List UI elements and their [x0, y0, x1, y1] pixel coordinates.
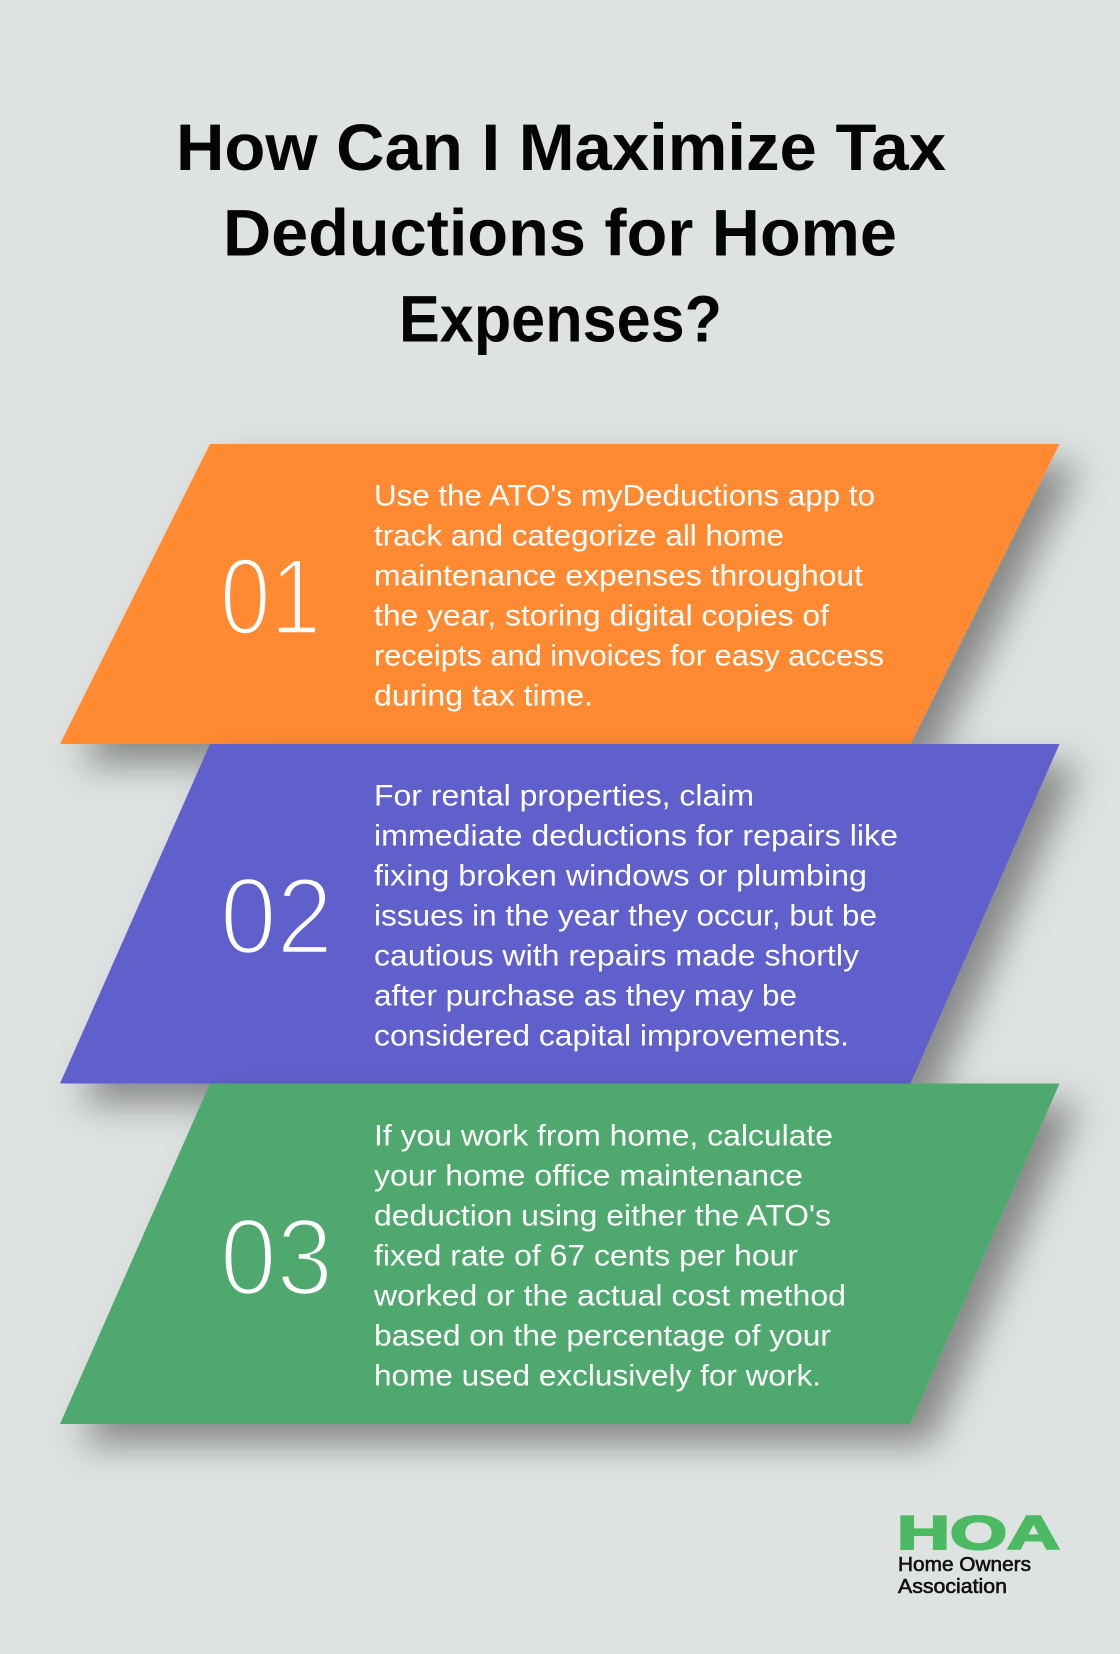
text: step 02 description: fixing broken windows or plumbing — [374, 860, 867, 892]
text: step 02 description: after purchase as they may be — [374, 980, 797, 1012]
text: step 01 description: maintenance expenses throughout — [374, 560, 863, 592]
number 03: 03 — [220, 1196, 333, 1318]
text: step 03 description: deduction using either the ATO's — [374, 1200, 831, 1232]
panel: step 03 — [60, 1084, 1060, 1424]
text: step 03 description: fixed rate of 67 cents per hour — [374, 1240, 798, 1272]
text: step 03 description: worked or the actual cost method — [373, 1280, 846, 1312]
number 01: 01 — [220, 536, 321, 658]
text: step 03 description: If you work from home, calculate — [374, 1120, 833, 1152]
title — [176, 110, 946, 356]
logo text: Association — [898, 1575, 1007, 1598]
orange parallelogram — [60, 444, 1060, 744]
title: How Can I Maximize Tax — [176, 110, 946, 184]
panel: step 02 — [60, 744, 1060, 1084]
panel: step 01 — [60, 444, 1060, 744]
logo text — [898, 1553, 1031, 1598]
logo: HOA Home Owners Association — [897, 1506, 1060, 1598]
text: step 02 description: cautious with repairs made shortly — [374, 940, 859, 972]
text: step 01 description: receipts and invoices for easy access — [374, 640, 884, 672]
title: Deductions for Home — [223, 196, 897, 270]
number 02: 02 — [220, 856, 333, 978]
text: step 02 description: For rental properties, claim — [374, 780, 754, 812]
logo text: Home Owners — [898, 1553, 1031, 1576]
text: step 03 description: home used exclusively for work. — [374, 1360, 821, 1392]
logo mark: HOA: HOA — [897, 1506, 1060, 1559]
text: step 02 description: considered capital improvements. — [374, 1020, 849, 1052]
text: step 03 description: your home office maintenance — [374, 1160, 803, 1192]
text: step 01 description: track and categorize all home — [374, 520, 784, 552]
text: step 01 description: during tax time. — [374, 680, 593, 712]
text: step 02 description: immediate deductions for repairs like — [374, 820, 898, 852]
text: step 02 description: issues in the year they occur, but be — [374, 900, 877, 932]
green parallelogram — [60, 1084, 1060, 1424]
text: step 01 description — [374, 480, 884, 712]
text: step 02 description — [374, 780, 898, 1052]
blue parallelogram — [60, 744, 1060, 1084]
title: Expenses? — [399, 282, 722, 356]
text: step 01 description: Use the ATO's myDeductions app to — [374, 480, 875, 512]
text: step 03 description: based on the percentage of your — [374, 1320, 831, 1352]
text: step 03 description — [373, 1120, 846, 1392]
text: step 01 description: the year, storing digital copies of — [374, 600, 830, 632]
